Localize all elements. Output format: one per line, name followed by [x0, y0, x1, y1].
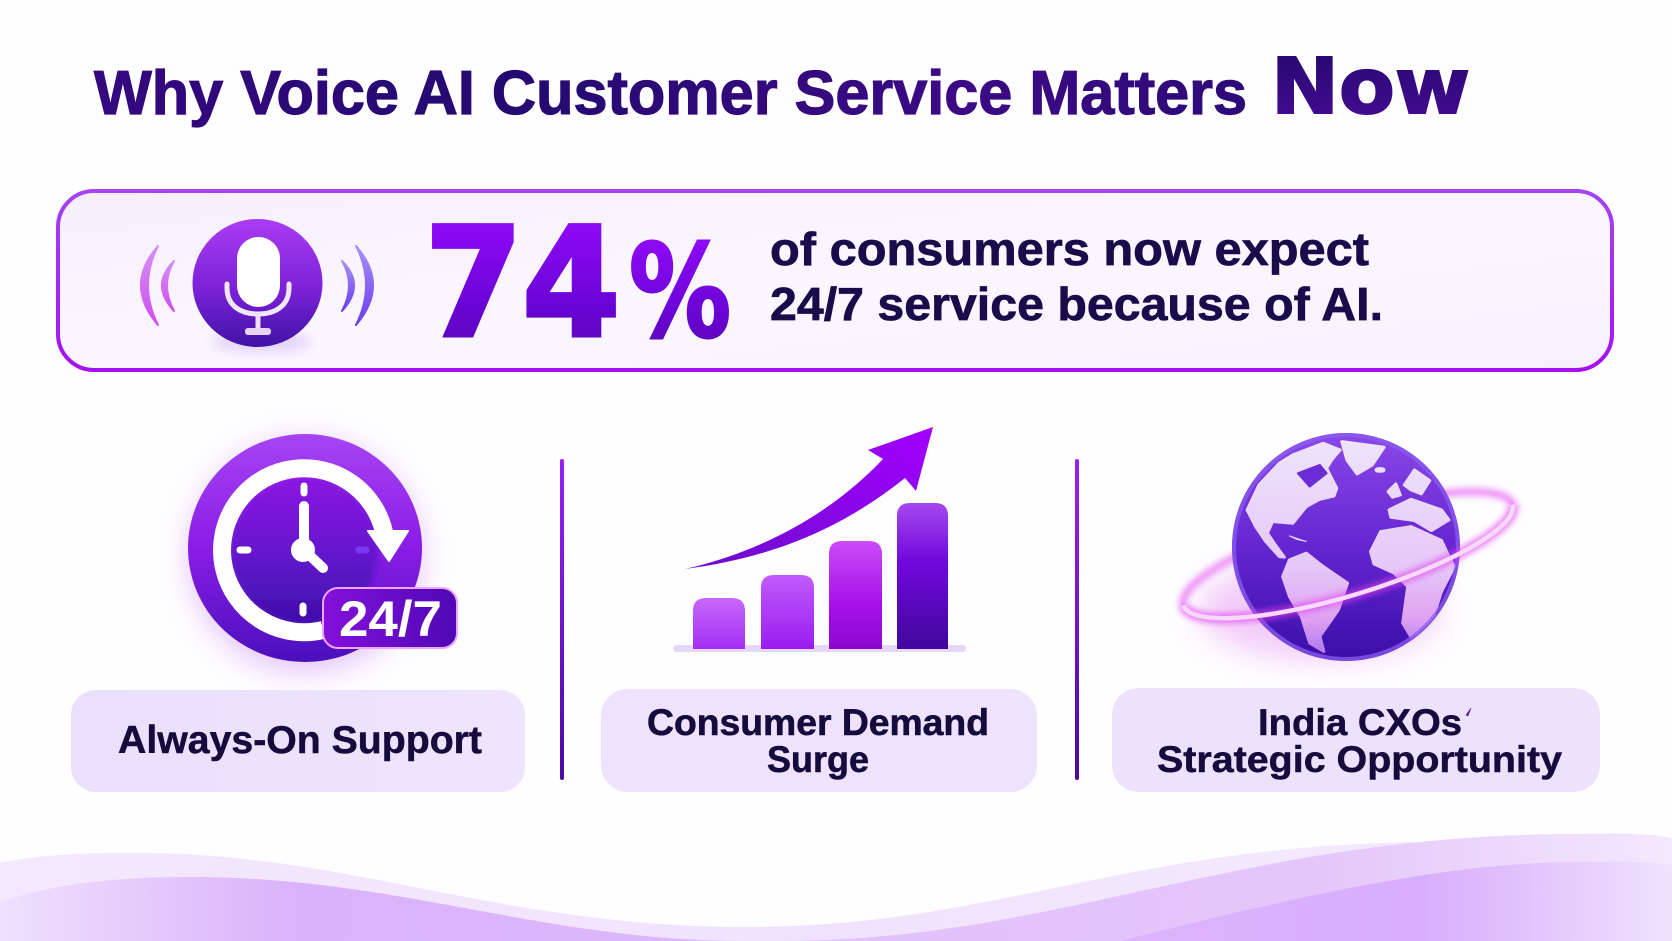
- label: India CXOs' Strategic Opportunity: [1112, 688, 1600, 792]
- label: India CXOs' Strategic Opportunity: Strategic Opportunity: [1157, 739, 1562, 780]
- label: Always-On Support: [71, 690, 525, 792]
- statistic description: 24/7 service because of AI.: [770, 278, 1383, 330]
- label: Consumer Demand Surge: Surge: [767, 739, 869, 780]
- orbit ring front half: [1184, 505, 1524, 644]
- icon: 24/7 clock: [188, 434, 457, 672]
- big number 74%: 74: [425, 197, 620, 371]
- label: Consumer Demand Surge: [601, 689, 1037, 792]
- continents: [1247, 442, 1454, 651]
- big number 74%: %: [629, 218, 731, 367]
- chart: rising bars with arrow: [673, 427, 966, 652]
- label: India CXOs' Strategic Opportunity: India CXOs: [1258, 702, 1462, 743]
- title: Now: [1271, 43, 1470, 132]
- label: Always-On Support: Always-On Support: [118, 719, 482, 762]
- icon: microphone with sound waves: [141, 219, 373, 352]
- bottom decorative waves: [0, 834, 1672, 941]
- title: [94, 43, 1470, 132]
- badge: 24/7: 24/7: [339, 591, 442, 647]
- badge: 24/7: [323, 588, 457, 648]
- big number 74%: [425, 197, 731, 371]
- statistic description: [770, 223, 1383, 330]
- icon: globe with orbit ring: [1172, 433, 1524, 661]
- arrow: [685, 427, 933, 569]
- panel: 74% statistic: [58, 191, 1612, 371]
- label: Consumer Demand Surge: Consumer Demand: [647, 702, 989, 743]
- orbit ring back half: [1172, 466, 1512, 605]
- statistic description: of consumers now expect: [770, 223, 1369, 275]
- title: Why Voice AI Customer Service Matters: [94, 59, 1247, 128]
